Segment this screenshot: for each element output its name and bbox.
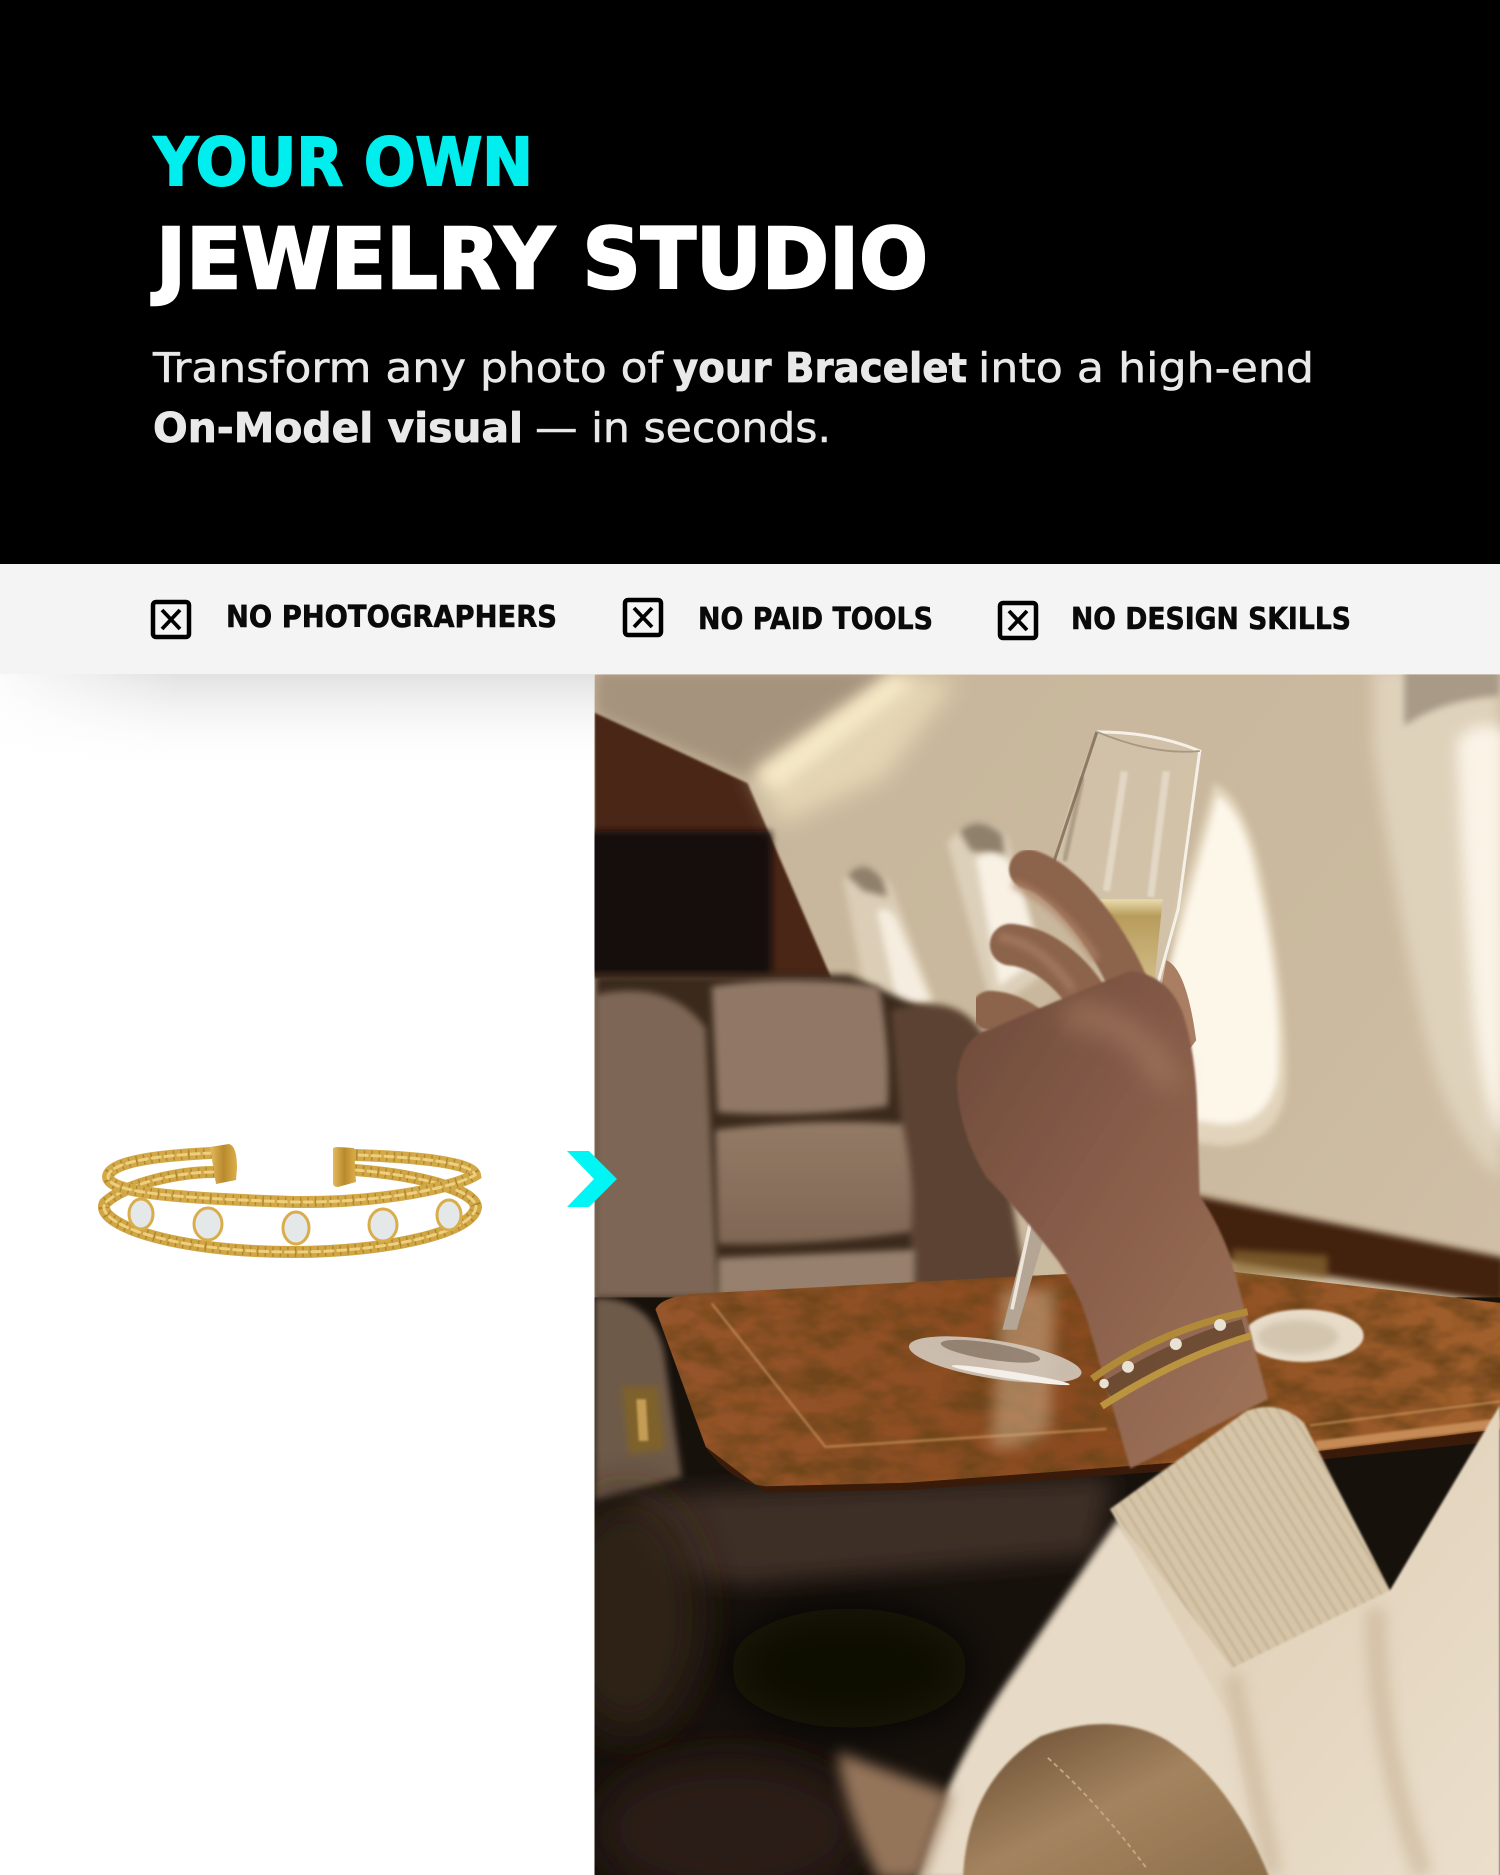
cream sweater [1110, 1405, 1500, 1875]
dark lower seat [556, 1297, 1500, 1875]
champagne glass [906, 732, 1200, 1392]
photo: woman with champagne in private jet [556, 670, 1500, 1875]
subtitle text [152, 344, 1314, 452]
subtitle text: into a high-end [978, 344, 1314, 392]
icon: crossed box [1000, 603, 1036, 638]
wood table [656, 1250, 1500, 1492]
panel: black header [0, 0, 1500, 564]
title: your own: YOUR OWN [153, 124, 533, 201]
illustration: gold bracelet product [104, 1144, 476, 1252]
sweater fold shading [1232, 1608, 1423, 1875]
subtitle text: On-Model visual [153, 404, 523, 452]
cabin wall [594, 674, 1500, 1298]
subtitle text: Transform any photo of [152, 344, 665, 392]
wood window ledge [1196, 1196, 1500, 1303]
cabin ceiling and dark wood [586, 670, 957, 978]
leather seat back [594, 975, 1029, 1309]
arrow: cyan chevron [567, 1151, 617, 1207]
item: no paid tools [625, 600, 933, 637]
bracelet on wrist [1092, 1312, 1251, 1406]
icon: crossed box [625, 600, 661, 635]
white trousers [916, 1519, 1268, 1875]
hand and forearm [957, 869, 1268, 1468]
item: no design skills: NO DESIGN SKILLS [1071, 602, 1351, 637]
cabin windows [843, 670, 1500, 1178]
subtitle text: — in seconds. [535, 404, 831, 452]
shadow under strip [31, 674, 594, 720]
plate [1244, 1309, 1364, 1362]
subtitle text: your Bracelet [673, 344, 967, 392]
foreground tan seat [963, 1724, 1270, 1875]
shoe [837, 1752, 951, 1875]
item: no photographers: NO PHOTOGRAPHERS [226, 600, 557, 635]
icon: crossed box [153, 602, 189, 637]
item: no paid tools: NO PAID TOOLS [698, 602, 933, 637]
title: jewelry studio: JEWELRY STUDIO [151, 210, 928, 308]
panel: no-requirements strip [0, 564, 1500, 674]
